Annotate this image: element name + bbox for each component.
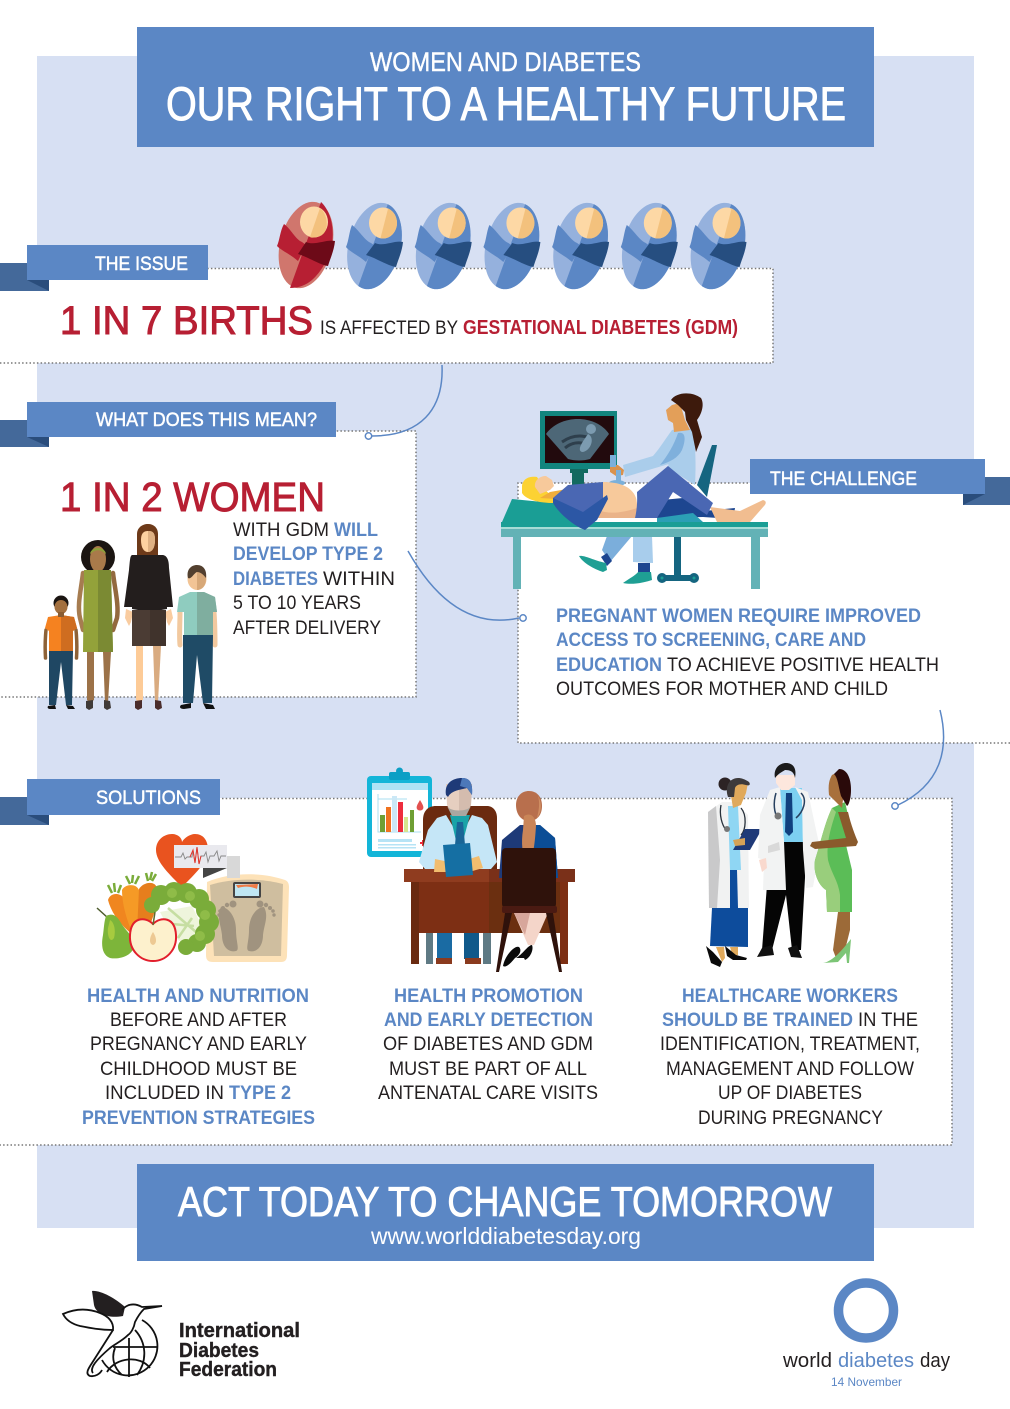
text block: GDM risk: WILL: [334, 520, 378, 541]
text block: healthcare workers: UP OF DIABETES: [718, 1083, 862, 1104]
text block: healthcare workers: IN THE: [858, 1010, 918, 1031]
text block: health and nutrition: PREGNANCY AND EARLY: [90, 1034, 307, 1055]
text block: healthcare workers: IDENTIFICATION, TREATMENT,: [660, 1034, 920, 1055]
text block: GDM risk: DEVELOP TYPE 2: [233, 544, 383, 565]
boy: [45, 596, 77, 709]
text block: health promotion: ANTENATAL CARE VISITS: [378, 1083, 598, 1104]
text block: GDM risk: [233, 520, 395, 639]
wordmark: [782, 1350, 950, 1372]
text block: health promotion: HEALTH PROMOTION: [394, 986, 583, 1007]
header subtitle: WOMEN AND DIABETES: [370, 47, 641, 77]
text block: healthcare workers: HEALTHCARE WORKERS: [682, 986, 898, 1007]
call to action: ACT TODAY TO CHANGE TOMORROW: [178, 1178, 832, 1225]
text block: challenge: PREGNANT WOMEN REQUIRE IMPROVED: [556, 606, 921, 627]
icon: heart with ECG: [156, 834, 240, 887]
text block: challenge: [556, 606, 939, 700]
icon: blue baby 2: [407, 197, 494, 295]
text block: healthcare workers: MANAGEMENT AND FOLLOW: [666, 1059, 914, 1080]
text block: challenge: TO ACHIEVE POSITIVE HEALTH: [667, 655, 939, 676]
panel: solutions: [0, 779, 952, 1145]
footer banner: [137, 1164, 874, 1261]
ribbon: the issue: THE ISSUE: [95, 253, 188, 275]
IDF wordmark: [179, 1320, 300, 1381]
logo: world diabetes day: [782, 1283, 950, 1389]
text block: health promotion: AND EARLY DETECTION: [384, 1010, 593, 1031]
ribbon: the issue: [0, 245, 208, 291]
illustration: ultrasound scene: [501, 393, 768, 589]
examination table: [501, 499, 768, 589]
text block: health promotion: OF DIABETES AND GDM: [383, 1034, 593, 1055]
icon: broccoli: [144, 882, 219, 955]
header title: OUR RIGHT TO A HEALTHY FUTURE: [166, 77, 846, 130]
text block: challenge: OUTCOMES FOR MOTHER AND CHILD: [556, 679, 888, 700]
text block: health promotion: [378, 986, 598, 1104]
icon: carrots: [108, 872, 157, 934]
desk: [404, 869, 575, 965]
icon: clipboard chart: [367, 768, 432, 857]
teen boy: [177, 565, 217, 709]
illustration: nutrition and scale: [97, 834, 289, 962]
date: 14 November: [831, 1375, 902, 1389]
ribbon: what does this mean: [0, 402, 336, 447]
connector: issue to meaning: [365, 365, 442, 439]
icon: blue circle: [838, 1283, 894, 1338]
ribbon: solutions: SOLUTIONS: [96, 787, 201, 809]
wordmark: world: [782, 1350, 832, 1372]
IDF wordmark: International: [179, 1320, 300, 1342]
header banner: [137, 27, 874, 147]
text block: health promotion: MUST BE PART OF ALL: [389, 1059, 587, 1080]
icon: apple: [130, 912, 176, 961]
text block: health and nutrition: PREVENTION STRATEGIES: [82, 1108, 315, 1129]
text block: GDM risk: 5 TO 10 YEARS: [233, 593, 361, 614]
statistic: 1 in 2 women: 1 IN 2 WOMEN: [60, 474, 325, 520]
doctor: [579, 393, 717, 584]
icon row: seven babies: [270, 196, 768, 295]
ribbon: what does this mean: WHAT DOES THIS MEAN?: [96, 409, 317, 431]
text block: GDM risk: WITH GDM: [233, 520, 329, 541]
icon: weighing scale: [206, 874, 289, 962]
doctor folder and hands: [434, 843, 483, 877]
ribbon: the challenge: [750, 459, 1010, 505]
issue statistic: 1 IN 7 BIRTHS: [60, 299, 313, 343]
logo: International Diabetes Federation: [63, 1291, 300, 1381]
IDF wordmark: Federation: [179, 1359, 277, 1381]
icon: blue baby 4: [545, 197, 631, 295]
issue statistic: IS AFFECTED BY: [320, 318, 458, 339]
text block: health and nutrition: TYPE 2: [229, 1083, 291, 1104]
patient seated: [496, 791, 562, 972]
text block: challenge: EDUCATION: [556, 655, 662, 676]
icon: blue baby 1: [339, 197, 425, 295]
website: www.worlddiabetesday.org: [370, 1223, 641, 1249]
icon: blue baby 6: [682, 197, 768, 295]
IDF wordmark: Diabetes: [179, 1340, 259, 1362]
text block: health and nutrition: CHILDHOOD MUST BE: [100, 1059, 297, 1080]
text block: health and nutrition: INCLUDED IN: [105, 1083, 224, 1104]
panel: the issue: [0, 196, 773, 363]
illustration: consultation: [367, 768, 575, 972]
patient: [522, 466, 766, 530]
icon: red baby: [270, 196, 342, 294]
connector: challenge to solutions: [892, 710, 944, 809]
text block: GDM risk: AFTER DELIVERY: [233, 618, 381, 639]
text block: GDM risk: WITHIN: [323, 569, 395, 590]
wordmark: day: [920, 1350, 950, 1372]
ribbon: the challenge: THE CHALLENGE: [770, 468, 917, 490]
illustration: healthcare workers: [706, 763, 858, 967]
wordmark: diabetes: [838, 1350, 914, 1372]
woman in suit: [124, 524, 173, 710]
doctor at desk: [419, 778, 497, 869]
text block: healthcare workers: SHOULD BE TRAINED: [662, 1010, 853, 1031]
background panel: [37, 56, 974, 1228]
issue statistic: GESTATIONAL DIABETES (GDM): [463, 317, 738, 339]
panel: the challenge: [518, 459, 1010, 743]
pregnant woman: [810, 769, 858, 963]
text block: health and nutrition: [82, 986, 315, 1129]
illustration: family: [45, 524, 217, 710]
doctor: [757, 763, 820, 958]
nurse: [706, 778, 762, 967]
panel: what does this mean: [0, 402, 416, 697]
icon: pear: [97, 908, 134, 958]
ribbon: solutions: [0, 779, 220, 825]
icon: blue baby 5: [613, 197, 700, 295]
icon: hummingbird and globe: [63, 1291, 162, 1377]
connector: meaning to challenge: [408, 551, 526, 621]
text block: challenge: ACCESS TO SCREENING, CARE AND: [556, 630, 866, 651]
text block: healthcare workers: DURING PREGNANCY: [698, 1108, 883, 1129]
icon: blue baby 3: [476, 197, 562, 295]
text block: GDM risk: DIABETES: [233, 569, 318, 590]
ultrasound monitor: [540, 411, 617, 485]
text block: health and nutrition: BEFORE AND AFTER: [110, 1010, 287, 1031]
text block: health and nutrition: HEALTH AND NUTRITION: [87, 986, 309, 1007]
text block: healthcare workers: [660, 986, 920, 1129]
woman in green: [79, 540, 118, 710]
issue statistic: [60, 299, 738, 343]
